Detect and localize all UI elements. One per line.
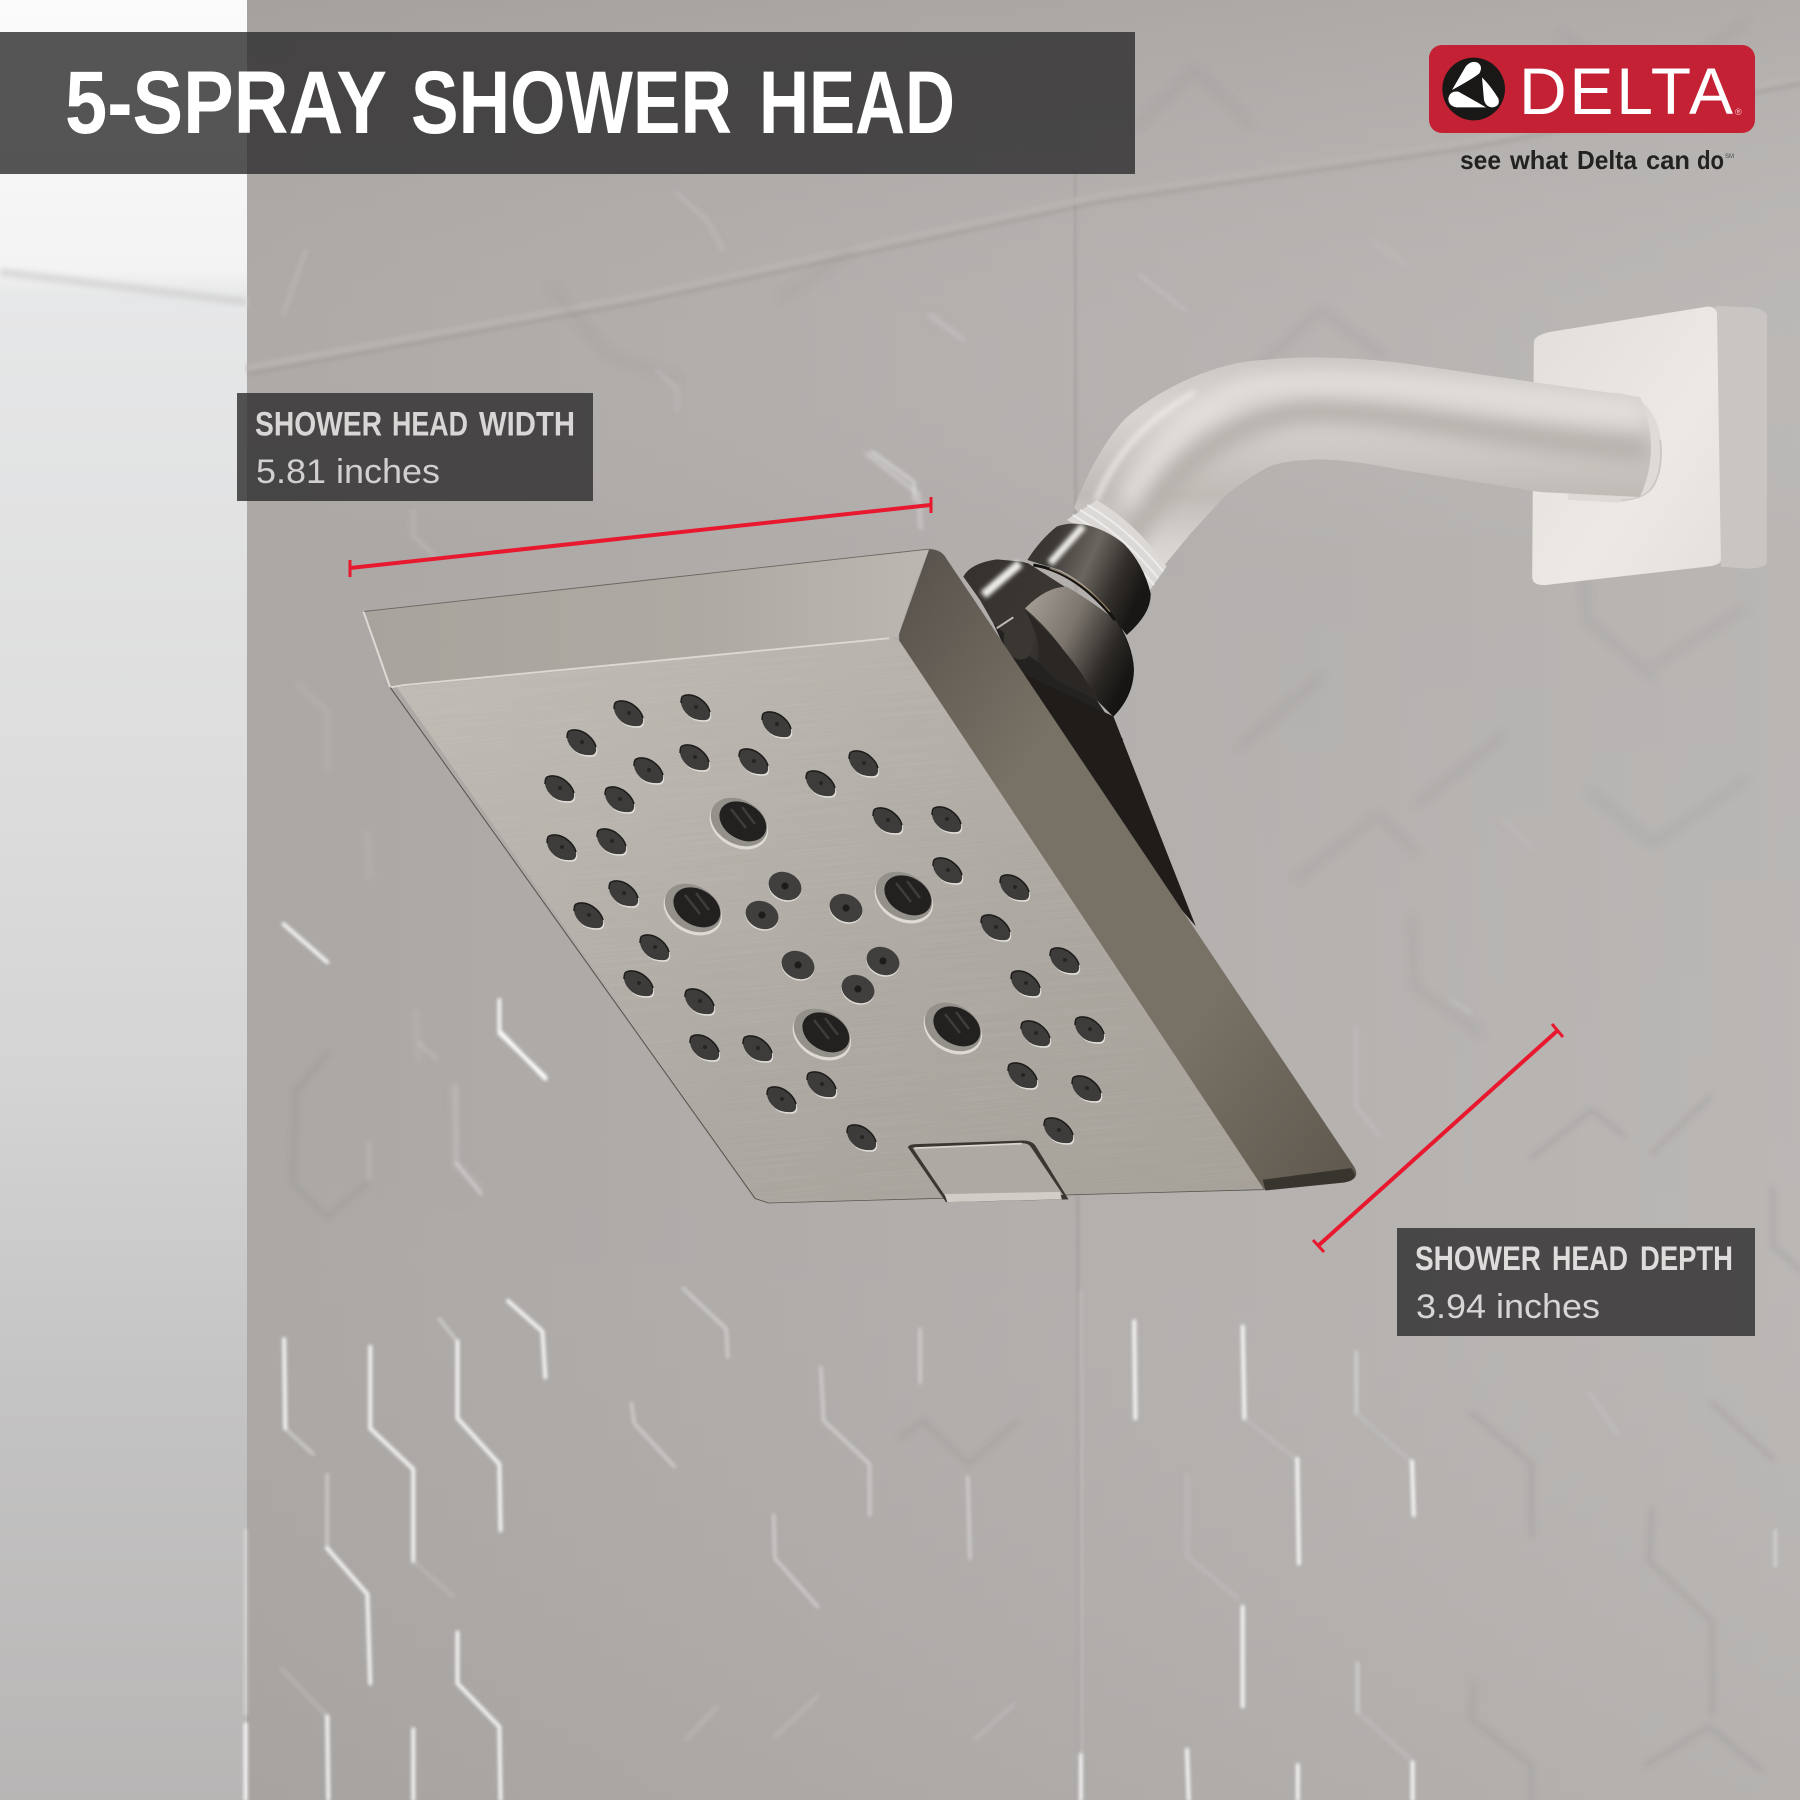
title text xyxy=(65,52,955,152)
bottom edge of side face xyxy=(1263,1168,1355,1190)
title text: 5-SPRAY xyxy=(65,52,387,152)
title bar xyxy=(0,32,1135,174)
width label: SHOWER xyxy=(255,406,382,444)
threaded section xyxy=(1067,500,1167,590)
top bevel xyxy=(363,549,929,687)
push button spray selector xyxy=(908,1140,1069,1202)
large spray holes xyxy=(655,788,991,1071)
red logo badge xyxy=(1429,45,1755,133)
wall plate xyxy=(1532,306,1767,585)
service mark: SM xyxy=(1725,154,1734,160)
shower arm and wall plate xyxy=(963,306,1767,740)
title text: HEAD xyxy=(759,52,955,152)
width label xyxy=(255,406,575,444)
tagline: Delta xyxy=(1577,145,1638,175)
center rubber nozzles xyxy=(741,867,904,1010)
tagline: can xyxy=(1646,145,1690,175)
swivel collar and ball xyxy=(963,524,1151,740)
Delta logo xyxy=(1429,45,1755,175)
dark rear housing xyxy=(1010,667,1196,926)
callout: shower head width xyxy=(237,393,593,501)
logo emblem xyxy=(1442,58,1505,120)
depth label: SHOWER xyxy=(1415,1240,1541,1278)
depth dimension line xyxy=(1313,1024,1563,1252)
left background panel xyxy=(0,0,247,1800)
width dimension line xyxy=(350,497,931,577)
arm tube xyxy=(1074,357,1651,580)
width label: WIDTH xyxy=(479,406,575,444)
title text: SHOWER xyxy=(411,52,732,152)
logo wordmark: DELTA xyxy=(1519,54,1733,128)
tagline: see xyxy=(1460,145,1501,175)
head side face xyxy=(899,549,1356,1190)
width value: 5.81 inches xyxy=(256,453,440,491)
tagline xyxy=(1460,145,1724,175)
registered mark: ® xyxy=(1735,107,1742,117)
width label: HEAD xyxy=(392,406,468,444)
depth label: DEPTH xyxy=(1640,1240,1733,1278)
tagline: do xyxy=(1697,145,1724,175)
tagline: what xyxy=(1509,145,1568,175)
spray nozzles small xyxy=(545,695,1105,1152)
depth label: HEAD xyxy=(1552,1240,1628,1278)
main face xyxy=(390,638,1264,1204)
depth label xyxy=(1415,1240,1733,1278)
shower head xyxy=(362,548,1356,1204)
depth value: 3.94 inches xyxy=(1416,1288,1600,1326)
callout: shower head depth xyxy=(1397,1228,1755,1336)
